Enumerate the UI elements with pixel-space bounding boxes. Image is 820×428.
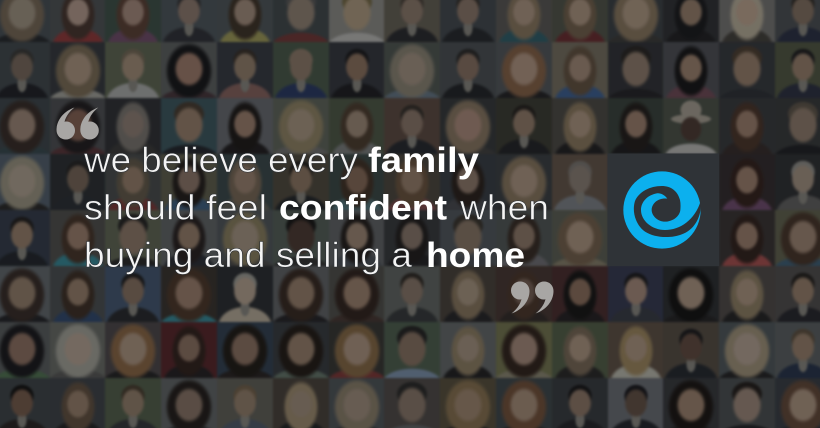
- portrait row 2: [0, 41, 820, 100]
- statement line 3: home: [426, 236, 525, 275]
- logo tile: [608, 154, 719, 266]
- icon: closing quotation mark: [511, 282, 554, 314]
- portrait row 3: [0, 98, 820, 155]
- statement line 2: when: [459, 188, 549, 228]
- statement line 2: [84, 188, 549, 228]
- statement line 1: we believe every: [83, 141, 359, 180]
- statement line 2: confident: [279, 188, 447, 228]
- statement line 1: [83, 141, 480, 180]
- portrait row 1: [0, 0, 820, 44]
- statement line 2: should feel: [84, 188, 267, 228]
- statement text: [83, 141, 549, 275]
- statement line 3: buying and selling a: [84, 236, 413, 275]
- portrait row 8: [0, 378, 820, 428]
- portrait row 5: [0, 210, 820, 267]
- portrait row 6: [0, 266, 820, 324]
- portrait row 7: [0, 322, 820, 380]
- icon: blue spiral logo: [623, 171, 701, 249]
- icon: opening quotation mark: [56, 108, 99, 140]
- portrait row 4: [0, 154, 820, 211]
- statement line 1: family: [368, 141, 480, 180]
